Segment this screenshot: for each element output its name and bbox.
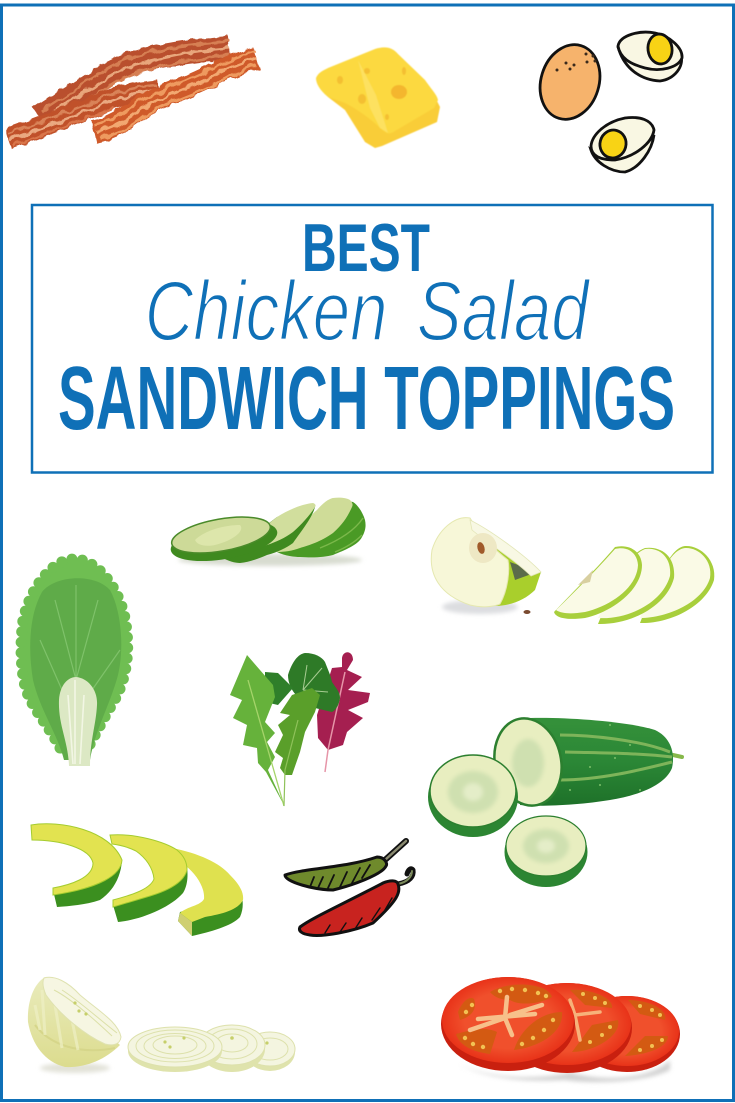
slice 1	[31, 824, 122, 907]
onion rings	[128, 1025, 295, 1072]
half egg lower	[591, 118, 654, 172]
icon: chili peppers	[285, 841, 413, 935]
icon: avocado slices	[31, 824, 243, 936]
slice 1	[168, 511, 280, 568]
icon: sliced cucumber	[168, 498, 366, 568]
title box	[32, 205, 712, 472]
title: Chicken Salad: Salad	[417, 265, 591, 359]
icon: bacon	[8, 41, 256, 146]
slice 2	[502, 983, 632, 1073]
apple wedge	[431, 518, 541, 607]
shadow	[460, 1060, 670, 1082]
apple slices	[554, 546, 714, 624]
dark round leaves	[265, 653, 340, 712]
icon: cheese	[316, 47, 440, 148]
icon: apple wedge and slices	[431, 518, 714, 624]
purple leaf	[317, 652, 370, 772]
slice 1	[441, 977, 575, 1071]
cut face	[487, 712, 569, 812]
slice 2	[110, 835, 188, 922]
whole egg	[531, 37, 609, 127]
title: Chicken Salad: Chicken	[145, 265, 388, 359]
slice 3	[574, 996, 680, 1072]
slice 3	[277, 498, 366, 557]
icon: whole cucumber with slices	[428, 712, 682, 887]
onion half	[28, 977, 121, 1067]
icon: eggs	[531, 32, 682, 172]
title: BEST: BEST	[302, 210, 430, 286]
icon: tomato slices	[441, 977, 680, 1082]
red chili	[299, 869, 413, 935]
half egg upper	[618, 32, 682, 81]
icon: mixed greens	[230, 652, 370, 807]
icon: onion	[28, 977, 295, 1073]
slice left	[428, 757, 518, 837]
slice 3	[172, 848, 243, 936]
slice lower	[504, 817, 588, 887]
icon: lettuce leaf	[21, 559, 128, 766]
light dandelion leaf	[230, 655, 285, 807]
slice 2	[223, 503, 316, 563]
mid leaf	[275, 688, 320, 806]
green chili	[285, 841, 406, 890]
